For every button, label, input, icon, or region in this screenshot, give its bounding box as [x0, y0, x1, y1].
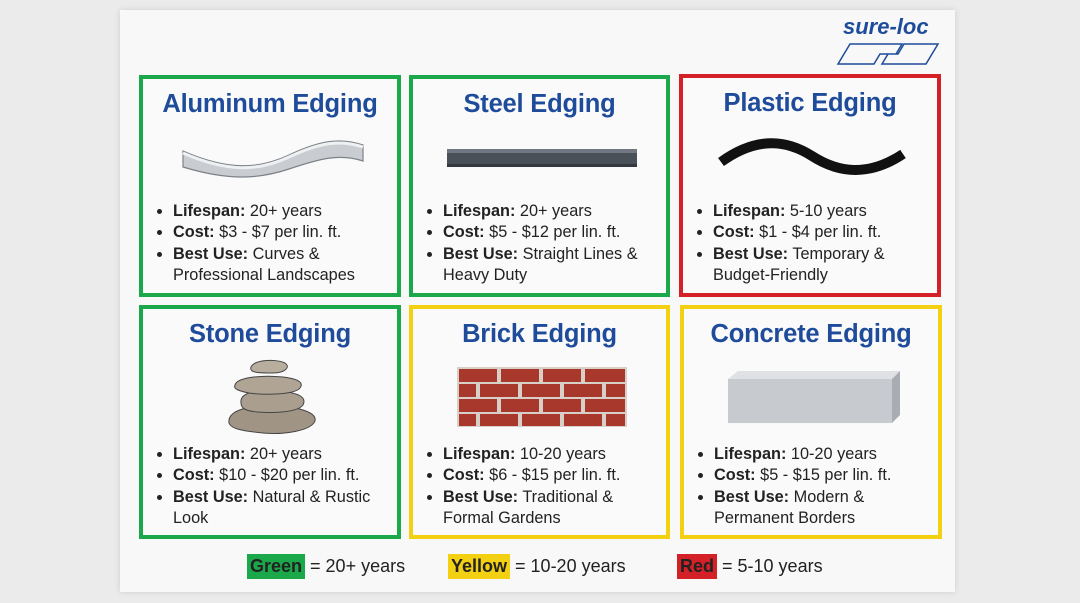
- panel: brick: Brick Edging: [462, 320, 617, 348]
- panel: brick: Best Use: Traditional & Formal Gardens: [443, 488, 613, 527]
- panel: concrete: Lifespan: 10-20 years: [714, 445, 877, 463]
- panel: stone: Cost: $10 - $20 per lin. ft.: [173, 466, 359, 484]
- panel: stone: Lifespan: 20+ years: [173, 445, 322, 463]
- legend: red: [677, 554, 823, 579]
- legend: red: = 5-10 years: [722, 556, 823, 576]
- logo: [836, 14, 940, 65]
- panel: concrete: Cost: $5 - $15 per lin. ft.: [714, 466, 891, 484]
- logo: sure-loc: [843, 14, 929, 39]
- icon: stone stack: [228, 360, 316, 434]
- panel: stone: Best Use: Natural & Rustic Look: [173, 488, 370, 527]
- legend: yellow: Yellow: [451, 556, 507, 576]
- panel: aluminum: Best Use: Curves & Professional Landscapes: [173, 245, 355, 284]
- panel: concrete: Best Use: Modern & Permanent Borders: [714, 488, 864, 527]
- panel: aluminum: Cost: $3 - $7 per lin. ft.: [173, 223, 341, 241]
- panel: concrete: Concrete Edging: [710, 320, 912, 348]
- panel: steel: Lifespan: 20+ years: [443, 202, 592, 220]
- legend: green: Green: [250, 556, 302, 576]
- legend: green: = 20+ years: [310, 556, 405, 576]
- panel: aluminum: Aluminum Edging: [162, 90, 378, 118]
- panel: steel: Best Use: Straight Lines & Heavy Duty: [443, 245, 638, 284]
- legend: yellow: [448, 554, 626, 579]
- panel: stone: [139, 305, 401, 539]
- panel: plastic: Plastic Edging: [724, 89, 896, 117]
- panel: aluminum: [139, 75, 401, 297]
- legend: red: Red: [680, 556, 714, 576]
- icon: brick wall: [457, 367, 627, 427]
- panel: steel: Cost: $5 - $12 per lin. ft.: [443, 223, 620, 241]
- panel: brick: [409, 305, 670, 539]
- panel: plastic: Best Use: Temporary & Budget-Friendly: [713, 245, 885, 284]
- board: [120, 10, 955, 592]
- panel: aluminum: Lifespan: 20+ years: [173, 202, 322, 220]
- icon: steel bar: [447, 149, 637, 167]
- panel: plastic: Lifespan: 5-10 years: [713, 202, 867, 220]
- panel: plastic: Cost: $1 - $4 per lin. ft.: [713, 223, 881, 241]
- panel: brick: Cost: $6 - $15 per lin. ft.: [443, 466, 620, 484]
- panel: brick: Lifespan: 10-20 years: [443, 445, 606, 463]
- panel: steel: Steel Edging: [463, 90, 616, 118]
- icon: aluminum strip: [182, 140, 364, 178]
- legend: green: [247, 554, 405, 579]
- panel: plastic: [679, 74, 941, 297]
- panel: stone: Stone Edging: [189, 320, 351, 348]
- panel: steel: [409, 75, 670, 297]
- icon: concrete block: [728, 371, 900, 423]
- icon: plastic strip: [718, 138, 906, 175]
- legend: yellow: = 10-20 years: [515, 556, 626, 576]
- panel: concrete: [680, 305, 942, 539]
